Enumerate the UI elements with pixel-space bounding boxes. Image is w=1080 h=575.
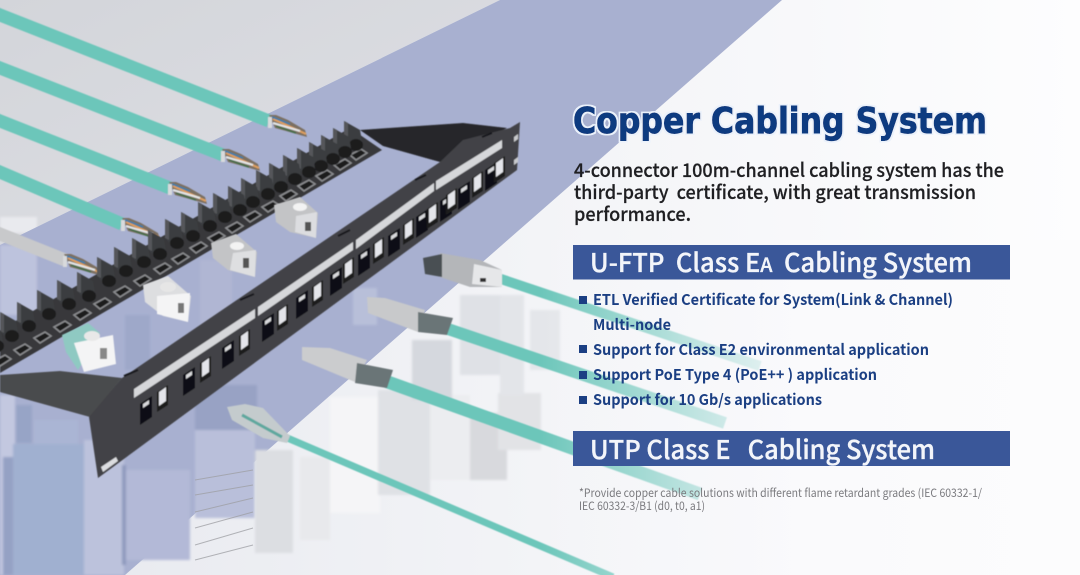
feature list: Multi-node <box>593 314 671 335</box>
intro text: performance. <box>574 200 691 227</box>
side brace left <box>0 371 122 417</box>
plug cable 4 <box>227 404 613 575</box>
front plate <box>89 122 520 478</box>
top brace right <box>360 123 507 162</box>
text backdrop <box>540 240 1080 575</box>
feature list: ETL Verified Certificate for System(Link & Channel) <box>593 289 953 310</box>
grey cable <box>0 232 102 276</box>
blue diagonal band <box>0 0 782 575</box>
cable 2 <box>0 66 260 171</box>
intro text: 4-connector 100m-channel cabling system has the <box>574 156 1004 183</box>
heading bar: UTP: UTP Class E Cabling System <box>590 430 935 467</box>
label strips <box>134 140 502 398</box>
city skyline on light side <box>195 295 560 560</box>
feature list <box>579 289 953 410</box>
jack 2 <box>211 234 257 277</box>
jack 4 <box>62 323 116 372</box>
rear cables <box>0 13 307 276</box>
footnote <box>579 485 982 514</box>
plug cable 3 <box>302 347 700 494</box>
title: Copper Cabling System <box>573 101 987 142</box>
feature list: Support for 10 Gb/s applications <box>593 389 822 410</box>
keystone holes <box>140 156 505 425</box>
feature list: Support for Class E2 environmental application <box>593 339 929 360</box>
front patch cables <box>227 253 760 575</box>
joint marks <box>124 133 492 376</box>
plug cable 2 <box>367 297 725 423</box>
intro text: third-party certificate, with great transmission <box>574 178 976 205</box>
heading bar: U-FTP: U-FTP Class EA Cabling System <box>590 243 972 280</box>
footnote: *Provide copper cable solutions with different flame retardant grades (IEC 60332-1/ <box>579 485 982 501</box>
rear bar with punch-down teeth <box>0 121 382 373</box>
cable 1 <box>0 13 307 137</box>
jack 1 <box>274 197 318 238</box>
cable 4 <box>0 170 160 240</box>
keystone jacks <box>62 197 318 372</box>
patch panel <box>0 121 520 478</box>
feature list: Support PoE Type 4 (PoE++ ) application <box>593 364 877 385</box>
intro text <box>574 156 1004 227</box>
jack 3 <box>143 276 191 322</box>
cable 3 <box>0 119 207 204</box>
city skyline on band <box>0 245 377 575</box>
ear slots <box>101 457 118 472</box>
footnote: IEC 60332-3/B1 (d0, t0, a1) <box>579 498 705 514</box>
plug cable 1 <box>423 253 760 366</box>
